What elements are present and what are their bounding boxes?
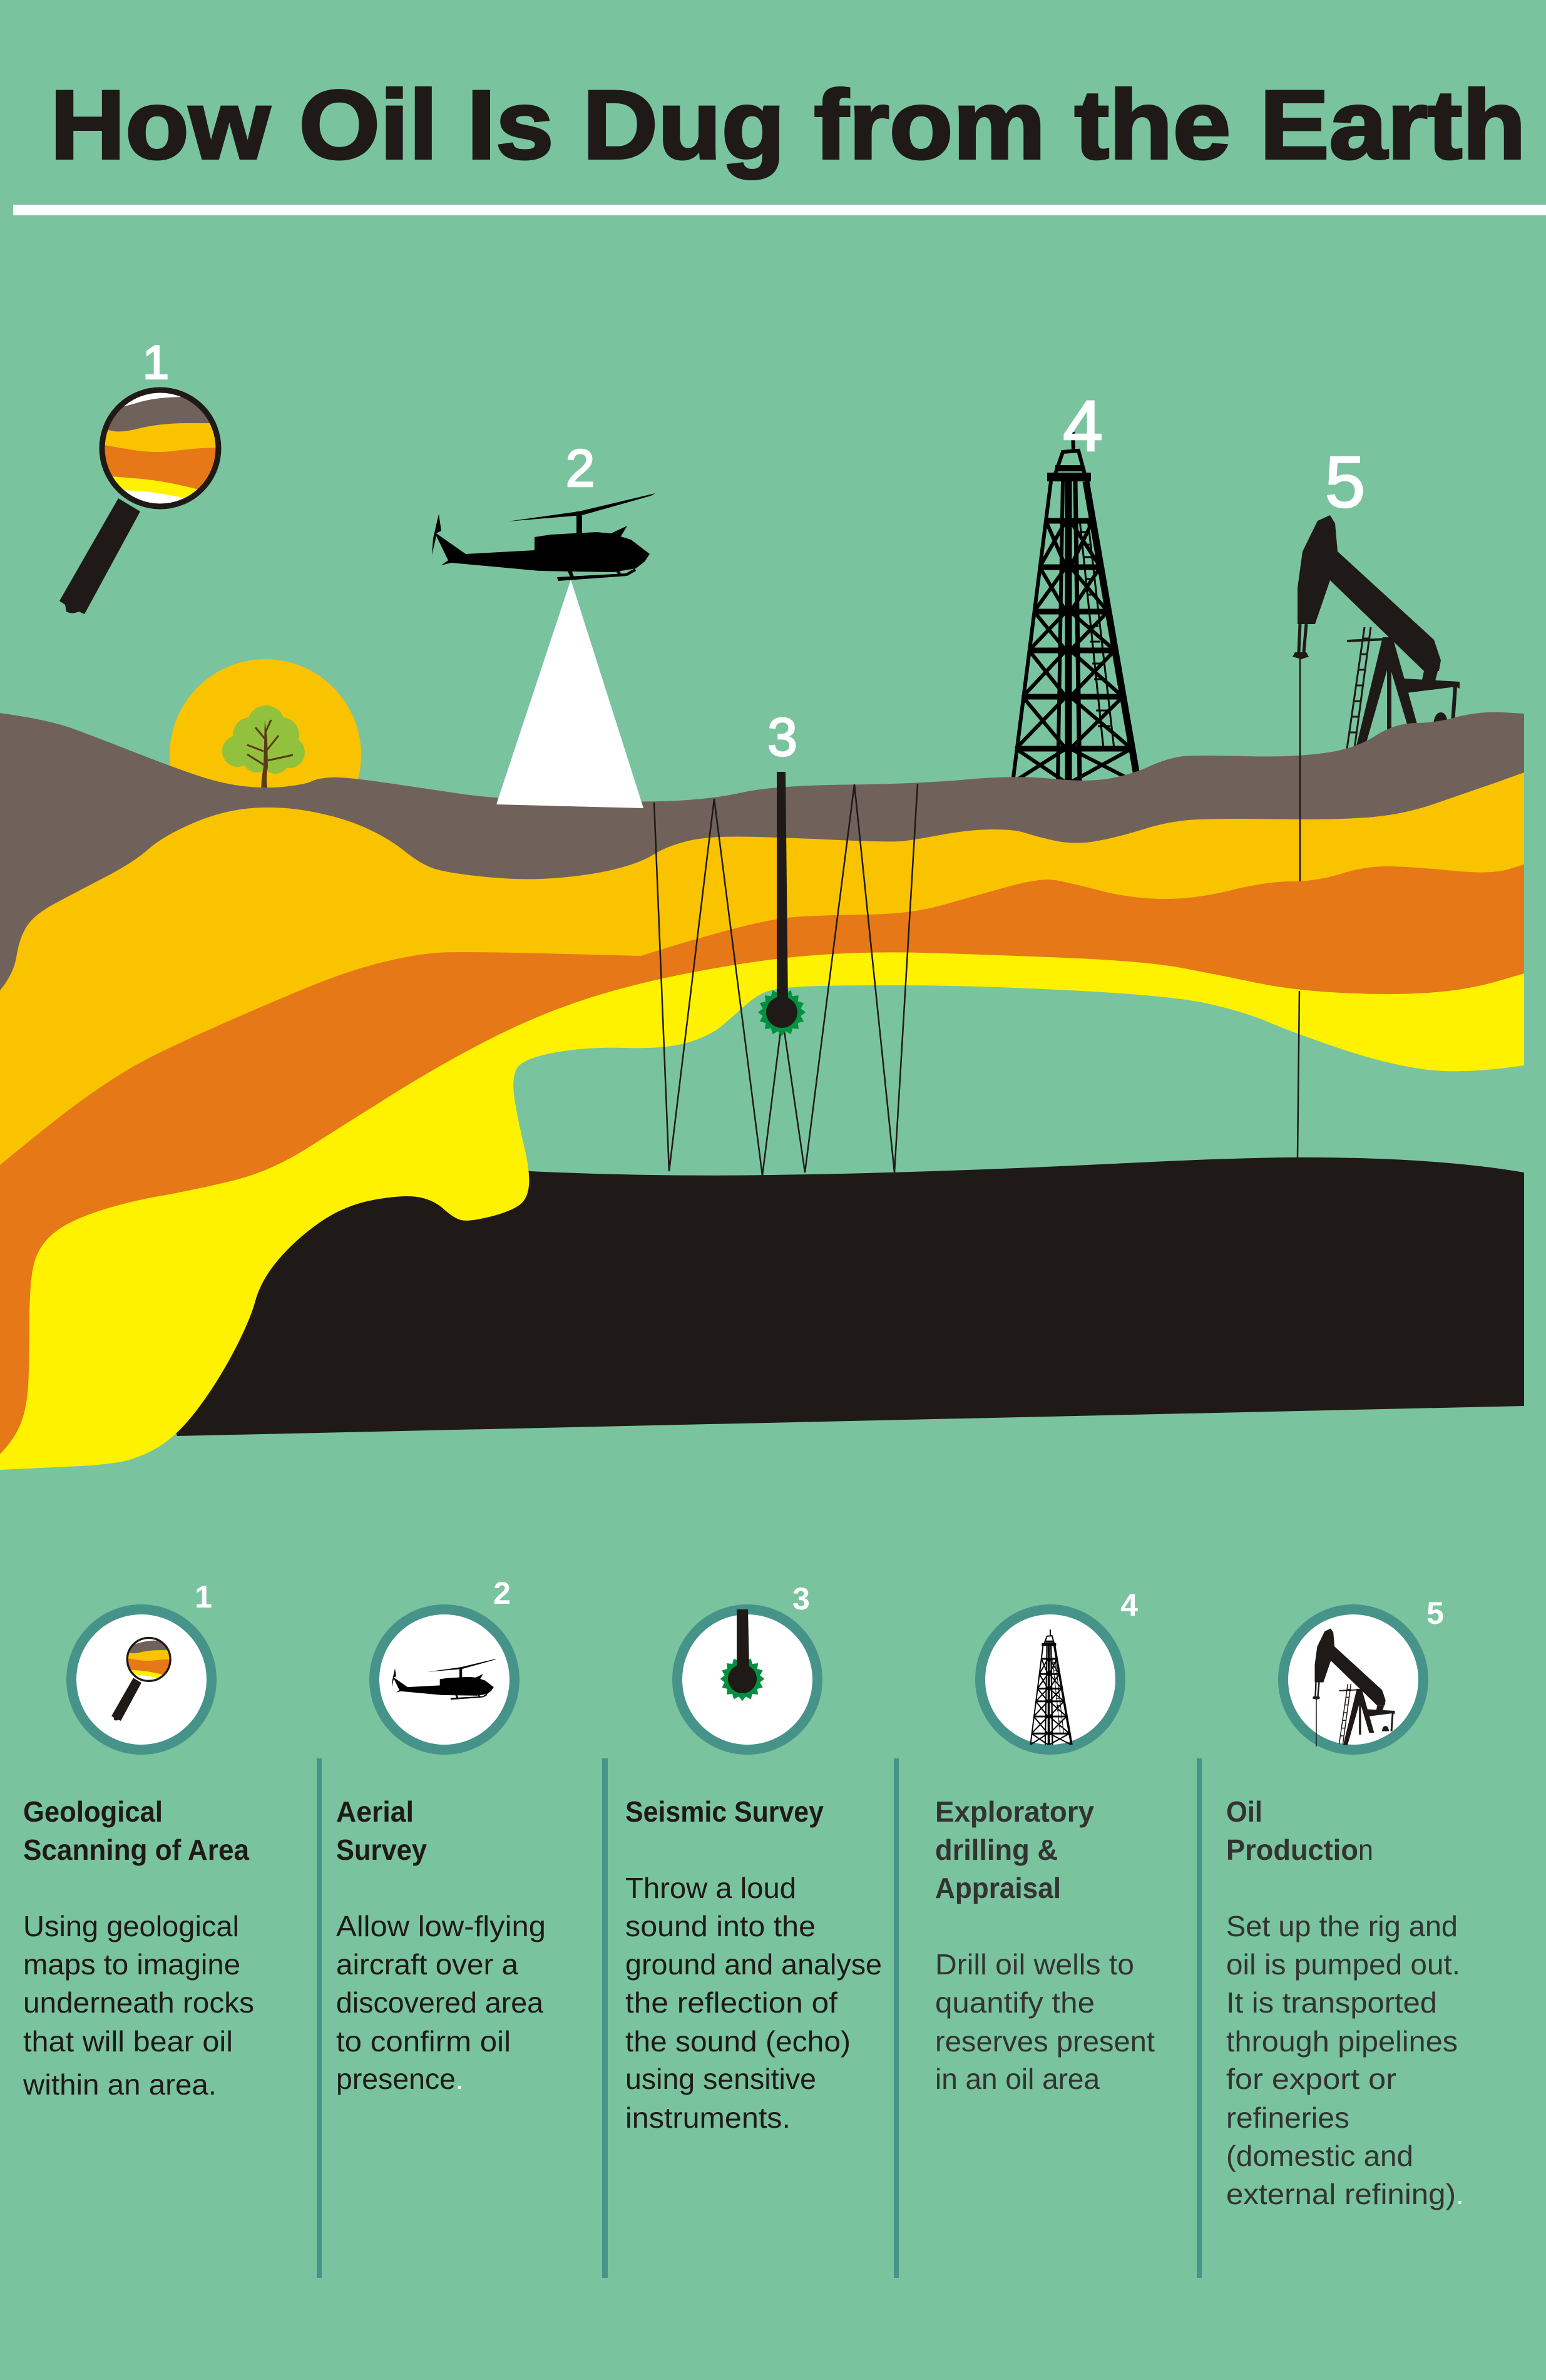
survey beam bbox=[496, 580, 643, 808]
layer: crude oil reservoir bbox=[169, 1127, 1524, 1436]
icon: helicopter bbox=[432, 493, 655, 581]
column 5: oil production: (domestic and bbox=[1226, 2140, 1413, 2172]
column 2: aerial survey: Survey bbox=[336, 1834, 427, 1866]
column 3: seismic survey: the sound (echo) bbox=[625, 2025, 851, 2058]
column 4: exploratory drilling: Exploratory bbox=[935, 1795, 1094, 1828]
column 4: exploratory drilling: quantify the bbox=[935, 1986, 1095, 2019]
number 2: 2 bbox=[566, 439, 595, 498]
layer: gold rock bbox=[0, 772, 1524, 1252]
column 3: seismic survey: Seismic Survey bbox=[625, 1795, 824, 1828]
column 2: aerial survey: discovered area bbox=[336, 1986, 543, 2019]
column 2: aerial survey: . bbox=[456, 2063, 464, 2095]
geological cross-section illustration bbox=[0, 336, 1524, 1470]
column 4: exploratory drilling: drilling & bbox=[935, 1834, 1058, 1866]
icon: pump jack bbox=[1293, 515, 1460, 751]
column 1: geological scanning: that will bear oil bbox=[23, 2025, 233, 2058]
icon: oil derrick bbox=[1013, 432, 1138, 782]
oil well wire lower bbox=[1298, 991, 1299, 1157]
icon: seismic drill bbox=[758, 772, 806, 1036]
column 1: geological scanning: Scanning of Area bbox=[23, 1834, 249, 1866]
column 2: aerial survey: to confirm oil bbox=[336, 2025, 511, 2058]
column 4: exploratory drilling: Appraisal bbox=[935, 1872, 1061, 1904]
column 2: aerial survey: Allow low-flying bbox=[336, 1910, 546, 1942]
number 5: 5 bbox=[1325, 441, 1365, 523]
column 2: aerial survey: Aerial bbox=[336, 1795, 414, 1828]
column 2: aerial survey bbox=[336, 1795, 546, 2095]
column 4: exploratory drilling: in an oil area bbox=[935, 2063, 1100, 2095]
icon: tree bbox=[222, 705, 305, 790]
sun bbox=[170, 659, 361, 851]
seismic reflection lines bbox=[654, 784, 918, 1176]
column 4: exploratory drilling bbox=[935, 1795, 1155, 2095]
title underline bbox=[13, 205, 1546, 215]
column 3: seismic survey bbox=[625, 1795, 882, 2134]
step icon 2: aerial survey bbox=[374, 1576, 514, 1750]
column 5: oil production: through pipelines bbox=[1226, 2025, 1458, 2058]
column 1: geological scanning: Using geological bbox=[23, 1910, 239, 1942]
layer: surface rock bbox=[0, 712, 1524, 1033]
step icon 3: seismic survey: 3 bbox=[792, 1581, 810, 1616]
step icon 2: aerial survey: 2 bbox=[493, 1576, 511, 1611]
column 4: exploratory drilling: reserves present bbox=[935, 2025, 1155, 2058]
column 5: oil production: refineries bbox=[1226, 2101, 1349, 2134]
column 3: seismic survey: the reflection of bbox=[625, 1986, 837, 2019]
step icon 5: oil production bbox=[1283, 1596, 1444, 1750]
column 5: oil production: oil is pumped out. bbox=[1226, 1948, 1460, 1981]
column dividers bbox=[317, 1758, 1202, 2278]
column 5: oil production bbox=[1226, 1795, 1464, 2210]
column 5: oil production: n bbox=[1358, 1834, 1373, 1866]
step icon 4: exploratory drilling bbox=[980, 1588, 1138, 1750]
number 4: 4 bbox=[1063, 386, 1103, 466]
number 3: 3 bbox=[767, 707, 797, 767]
column 3: seismic survey: using sensitive bbox=[625, 2063, 816, 2095]
title: How Oil Is Dug from the Earth bbox=[50, 71, 1526, 180]
layer: yellow rock bbox=[0, 952, 1524, 1470]
step icon 5: oil production: 5 bbox=[1426, 1596, 1444, 1631]
column 5: oil production: Set up the rig and bbox=[1226, 1910, 1458, 1942]
column 1: geological scanning: maps to imagine bbox=[23, 1948, 240, 1981]
icon: magnifying glass bbox=[59, 390, 225, 614]
column 1: geological scanning bbox=[23, 1795, 254, 2101]
column 5: oil production: Oil bbox=[1226, 1795, 1262, 1828]
column 2: aerial survey: presence bbox=[336, 2063, 456, 2095]
column 1: geological scanning: within an area. bbox=[23, 2068, 217, 2101]
column 5: oil production: It is transported bbox=[1226, 1986, 1437, 2019]
layer: orange rock bbox=[0, 864, 1524, 1459]
step icon 1: geological scan bbox=[71, 1579, 212, 1750]
column 4: exploratory drilling: Drill oil wells to bbox=[935, 1948, 1134, 1981]
column 3: seismic survey: ground and analyse bbox=[625, 1948, 882, 1981]
column 3: seismic survey: instruments. bbox=[625, 2101, 791, 2134]
column 3: seismic survey: sound into the bbox=[625, 1910, 816, 1942]
oil well wire upper bbox=[1299, 658, 1301, 884]
column 2: aerial survey: aircraft over a bbox=[336, 1948, 518, 1981]
column 5: oil production: Productio bbox=[1226, 1834, 1358, 1866]
column 3: seismic survey: Throw a loud bbox=[625, 1872, 796, 1904]
step icon 1: geological scan: 1 bbox=[195, 1579, 212, 1614]
column 5: oil production: external refining) bbox=[1226, 2178, 1456, 2210]
column 1: geological scanning: underneath rocks bbox=[23, 1986, 254, 2019]
step icon 4: exploratory drilling: 4 bbox=[1120, 1588, 1138, 1623]
number 1: 1 bbox=[143, 336, 169, 389]
column 5: oil production: for export or bbox=[1226, 2063, 1396, 2095]
step icon 3: seismic survey bbox=[677, 1581, 817, 1750]
column 1: geological scanning: Geological bbox=[23, 1795, 163, 1828]
column 5: oil production: . bbox=[1456, 2178, 1464, 2210]
